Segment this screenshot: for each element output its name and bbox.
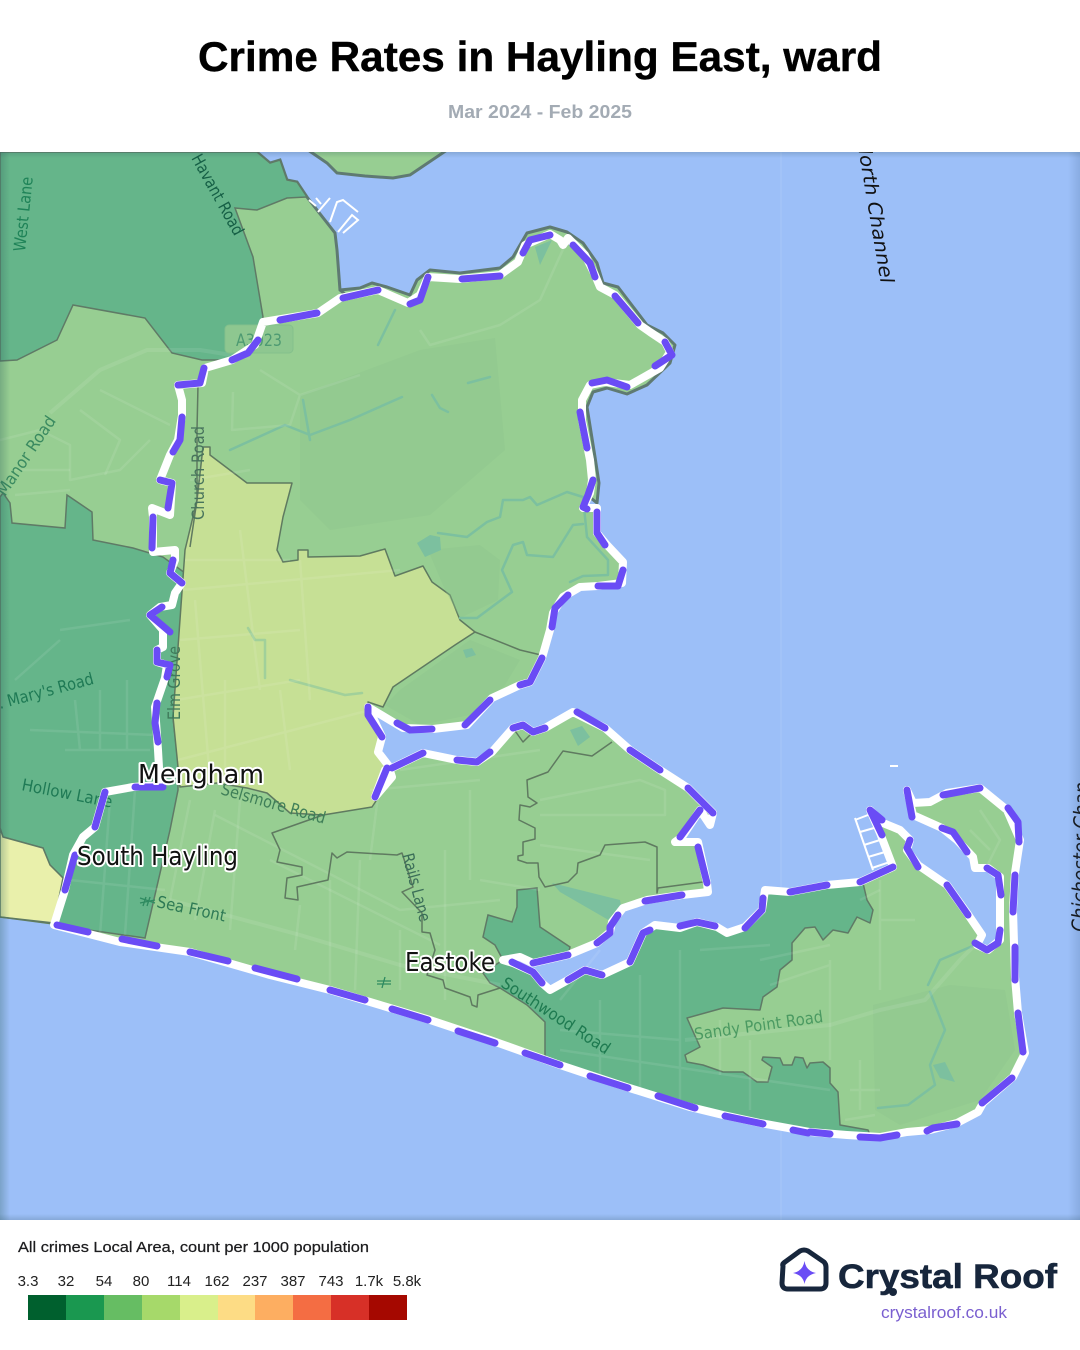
road label: Church Road: Church Road — [189, 426, 208, 520]
date range subtitle: Mar 2024 - Feb 2025 — [448, 101, 632, 122]
road label: Sea Front: Sea Front — [155, 892, 228, 926]
legend scale values: 80 — [133, 1273, 149, 1290]
road label: Selsmore Road: Selsmore Road — [219, 780, 328, 828]
road label: Southwood Road: Southwood Road — [498, 973, 614, 1058]
streams — [230, 310, 975, 1108]
road label: West Lane: West Lane — [10, 176, 37, 252]
land: northeast coast with dark shore line — [340, 227, 675, 503]
place label: Mengham: Mengham — [138, 760, 264, 790]
inner district boundary lines — [0, 385, 703, 1007]
place label: South Hayling: South Hayling — [77, 842, 238, 872]
legend scale values: 162 — [204, 1273, 230, 1290]
ward land — [54, 234, 1025, 1137]
legend scale values: 5.8k — [393, 1273, 422, 1290]
tile seam in water — [780, 152, 782, 1220]
parkland shading — [300, 338, 1015, 1125]
map edge shading — [0, 152, 1080, 1220]
road label: Sandy Point Road: Sandy Point Road — [693, 1007, 824, 1044]
place label: Eastoke: Eastoke — [405, 948, 495, 978]
legend scale values: 387 — [280, 1273, 306, 1290]
legend scale values — [18, 1273, 422, 1290]
legend scale values: 32 — [58, 1273, 74, 1290]
marina pontoons east — [855, 766, 898, 870]
ward boundary white casing — [54, 234, 1025, 1137]
water background — [0, 152, 1080, 1220]
footbridge icons — [140, 897, 391, 988]
road label: Elm Grove: Elm Grove — [165, 646, 184, 720]
shoreline west of the channel — [257, 152, 340, 290]
ward boundary purple dashes — [57, 235, 1023, 1138]
yellow-green higher-crime region Mengham — [173, 447, 475, 815]
legend scale values: 3.3 — [18, 1273, 38, 1290]
low-crime darker region southwest — [0, 493, 185, 938]
A3023 road shield: A3023 — [236, 331, 282, 350]
street network — [0, 245, 1000, 1120]
footer panel — [0, 1220, 1080, 1350]
marina pontoons north — [309, 198, 358, 233]
legend scale values: 54 — [96, 1273, 112, 1290]
road label: Hollow Lane: Hollow Lane — [20, 775, 114, 811]
logo: house icon — [782, 1250, 826, 1289]
water label: North Channel: North Channel — [852, 138, 898, 286]
ponds and wetland patches — [417, 240, 955, 1082]
land: north shore across the channel — [308, 150, 447, 178]
pale yellow region far southwest — [0, 828, 63, 923]
header panel — [0, 0, 1080, 152]
land: mainland west of ward — [0, 152, 345, 935]
dark green region Eastoke and Southwood — [483, 883, 873, 1135]
logo: wordmark: Crystal Roof — [838, 1258, 1058, 1296]
legend scale values: 743 — [318, 1273, 344, 1290]
legend title: All crimes Local Area, count per 1000 population — [18, 1239, 369, 1256]
legend scale values: 1.7k — [355, 1273, 384, 1290]
website link text: crystalroof.co.uk — [881, 1303, 1008, 1322]
dark green block north of Eastoke — [483, 888, 570, 963]
legend scale values: 237 — [242, 1273, 268, 1290]
legend colour scale — [28, 1295, 407, 1320]
low-crime darker region northwest — [0, 152, 307, 361]
title: Crime Rates in Hayling East, ward — [198, 33, 882, 80]
legend scale values: 114 — [167, 1273, 191, 1290]
road label: Havant Road: Havant Road — [188, 151, 248, 239]
road label: Rails Lane: Rails Lane — [398, 851, 435, 924]
A3023 road shield — [225, 325, 293, 353]
